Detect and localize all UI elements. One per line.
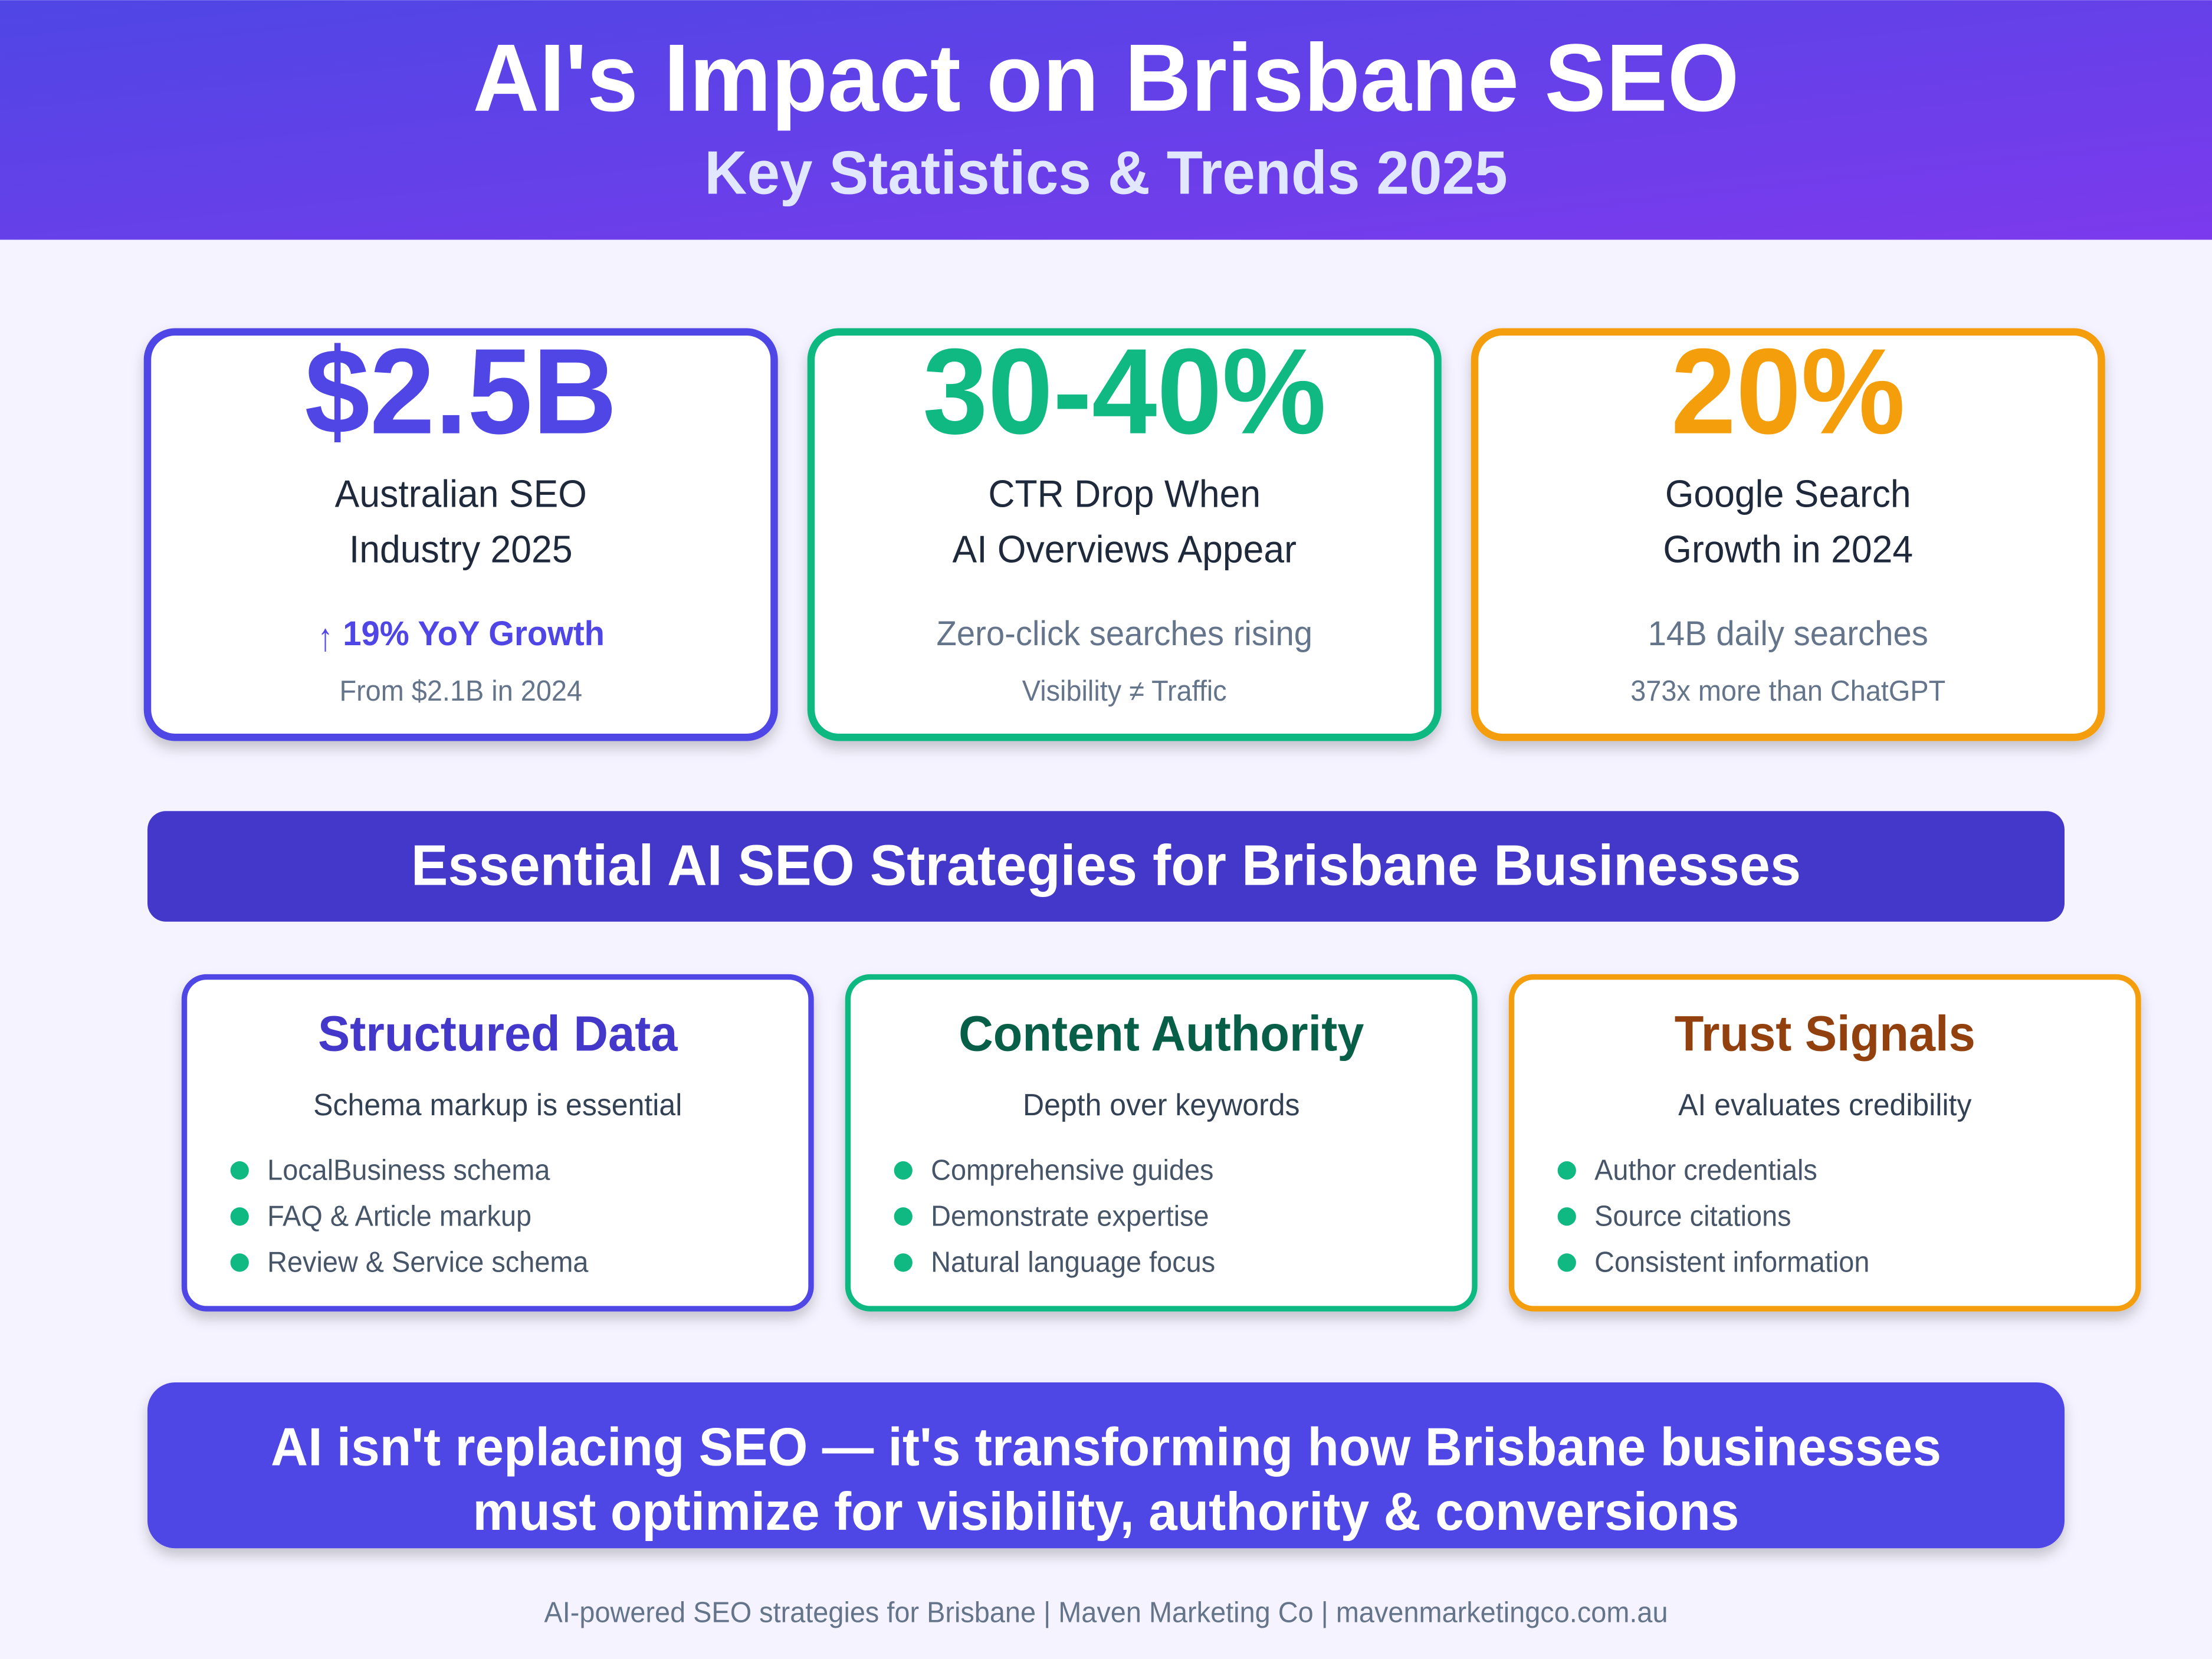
section heading text: Essential AI SEO Strategies for Brisbane Businesses	[411, 833, 1801, 898]
stat label: Australian SEO	[335, 472, 587, 515]
trend note: Zero-click searches rising	[936, 615, 1312, 653]
stat: 30-40%: 30-40%	[923, 323, 1326, 459]
bullet list: Natural language focus	[931, 1247, 1215, 1279]
panel: stat card Google search growth	[1475, 323, 2101, 737]
heading: Trust Signals	[1675, 1006, 1975, 1062]
bullet list: LocalBusiness schema	[267, 1154, 550, 1186]
bullet list: Review & Service schema	[267, 1247, 589, 1279]
tagline: Depth over keywords	[1023, 1088, 1300, 1122]
panel: stat card Australian SEO industry	[147, 323, 774, 737]
bullet list: Comprehensive guides	[931, 1154, 1213, 1186]
stat label: Industry 2025	[349, 527, 573, 571]
stat label	[1663, 472, 1913, 571]
subtitle: Key Statistics & Trends 2025	[704, 139, 1508, 207]
comparison note: 373x more than ChatGPT	[1630, 675, 1945, 707]
tagline: Schema markup is essential	[313, 1088, 682, 1122]
callout: key takeaway	[147, 1382, 2065, 1548]
bullet list	[894, 1154, 1215, 1279]
header banner	[0, 0, 2212, 239]
stat label	[953, 472, 1297, 571]
title: AI's Impact on Brisbane SEO	[473, 24, 1739, 131]
bullet list: Source citations	[1594, 1201, 1791, 1233]
heading: Structured Data	[318, 1006, 678, 1062]
visibility note: Visibility ≠ Traffic	[1022, 675, 1227, 707]
bullet list	[1558, 1154, 1869, 1279]
stat: 20%: 20%	[1671, 323, 1905, 459]
comparison note: From $2.1B in 2024	[339, 675, 582, 707]
stat: $2.5B: $2.5B	[304, 323, 617, 459]
footer: AI-powered SEO strategies for Brisbane | Maven Marketing Co | mavenmarketingco.com.au	[544, 1596, 1668, 1628]
section heading banner	[147, 811, 2065, 922]
bullet list: FAQ & Article markup	[267, 1201, 531, 1233]
volume note: 14B daily searches	[1648, 615, 1928, 653]
stat label: Google Search	[1665, 472, 1911, 515]
growth note: ↑	[318, 615, 333, 659]
bullet list: Author credentials	[1594, 1154, 1817, 1186]
tagline: AI evaluates credibility	[1678, 1088, 1972, 1122]
stat label: Growth in 2024	[1663, 527, 1913, 571]
bullet list: Consistent information	[1594, 1247, 1869, 1279]
panel: Structured Data	[184, 977, 811, 1309]
heading: Content Authority	[959, 1006, 1364, 1062]
stat label	[335, 472, 587, 571]
panel: stat card CTR drop	[811, 323, 1438, 737]
bullet list	[231, 1154, 589, 1279]
panel: Content Authority	[848, 977, 1475, 1309]
stat label: AI Overviews Appear	[953, 527, 1297, 571]
callout text: must optimize for visibility, authority & conversions	[473, 1481, 1739, 1541]
growth note: 19% YoY Growth	[343, 615, 605, 653]
stat label: CTR Drop When	[988, 472, 1261, 515]
bullet list: Demonstrate expertise	[931, 1201, 1209, 1233]
callout text: AI isn't replacing SEO — it's transforming how Brisbane businesses	[271, 1417, 1941, 1477]
callout text	[271, 1417, 1941, 1541]
panel: Trust Signals	[1511, 977, 2138, 1309]
